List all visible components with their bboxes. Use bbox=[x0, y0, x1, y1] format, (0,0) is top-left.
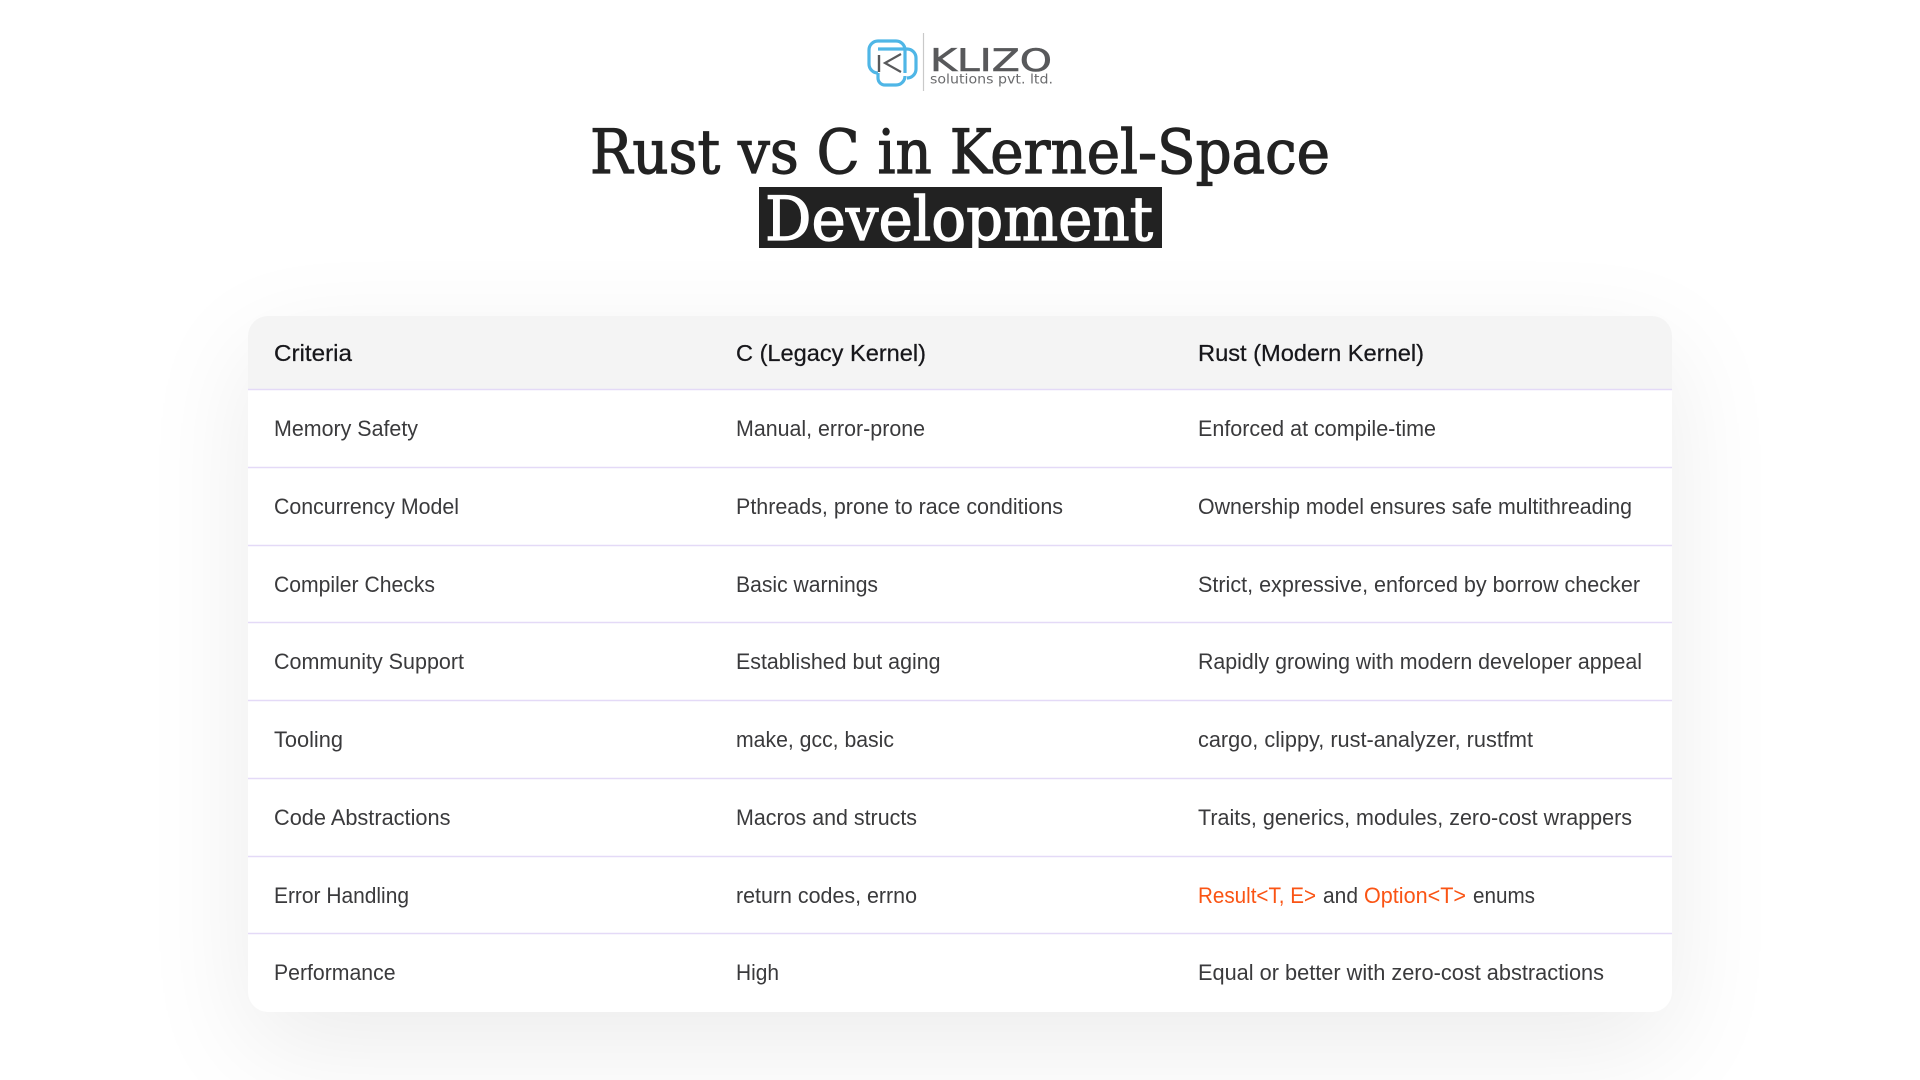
logo wordmark: KLIZO bbox=[930, 43, 1052, 79]
row: concurrency model: Pthreads, prone to race conditions bbox=[736, 494, 1063, 519]
row: performance: High bbox=[736, 960, 779, 985]
row: memory safety bbox=[274, 416, 1436, 441]
row: error handling: enums bbox=[1473, 883, 1535, 908]
row: concurrency model: Concurrency Model bbox=[274, 494, 459, 519]
title bbox=[590, 117, 1330, 255]
row: concurrency model: Ownership model ensures safe multithreading bbox=[1198, 494, 1632, 519]
row: code abstractions: Traits, generics, modules, zero-cost wrappers bbox=[1198, 805, 1632, 830]
row: code abstractions bbox=[274, 805, 1632, 830]
logo divider bbox=[922, 33, 924, 91]
row: performance bbox=[274, 960, 1604, 985]
row: performance: Equal or better with zero-cost abstractions bbox=[1198, 960, 1604, 985]
row: memory safety: Manual, error-prone bbox=[736, 416, 925, 441]
table card shadow bbox=[248, 316, 1672, 1012]
row: code abstractions: Macros and structs bbox=[736, 805, 917, 830]
row: compiler checks: Strict, expressive, enforced by borrow checker bbox=[1198, 572, 1640, 597]
row: performance: Performance bbox=[274, 960, 396, 985]
row: community support: Community Support bbox=[274, 649, 465, 674]
table header: Rust (Modern Kernel) bbox=[1198, 340, 1424, 366]
title highlight: Development bbox=[765, 184, 1153, 255]
row: tooling: Tooling bbox=[274, 727, 343, 752]
row: error handling bbox=[274, 883, 1535, 908]
comparison table bbox=[248, 316, 1672, 985]
row: error handling: Option<T> bbox=[1364, 883, 1466, 908]
row: community support: Established but aging bbox=[736, 649, 940, 674]
row: error handling: and bbox=[1323, 883, 1358, 908]
row: community support bbox=[274, 649, 1642, 674]
table header: C (Legacy Kernel) bbox=[736, 340, 926, 366]
table header bbox=[248, 316, 1672, 389]
row: tooling: make, gcc, basic bbox=[736, 727, 894, 752]
row: memory safety: Enforced at compile-time bbox=[1198, 416, 1436, 441]
row: memory safety: Memory Safety bbox=[274, 416, 419, 441]
row: tooling: cargo, clippy, rust-analyzer, rustfmt bbox=[1198, 727, 1534, 752]
row: compiler checks bbox=[274, 572, 1640, 597]
logo bbox=[869, 33, 1053, 91]
row: compiler checks: Basic warnings bbox=[736, 572, 878, 597]
row: error handling: Error Handling bbox=[274, 883, 409, 908]
row: community support: Rapidly growing with modern developer appeal bbox=[1198, 649, 1642, 674]
row: concurrency model bbox=[274, 494, 1632, 519]
table header: Criteria bbox=[274, 340, 352, 366]
row: tooling bbox=[274, 727, 1534, 752]
row: error handling: return codes, errno bbox=[736, 883, 917, 908]
logo tagline: solutions pvt. ltd. bbox=[930, 72, 1053, 88]
icon: klizo mark bbox=[869, 41, 916, 85]
row: compiler checks: Compiler Checks bbox=[274, 572, 435, 597]
row: error handling: Result<T, E> bbox=[1198, 883, 1316, 908]
title line one: Rust vs C in Kernel-Space bbox=[590, 117, 1330, 188]
row: code abstractions: Code Abstractions bbox=[274, 805, 450, 830]
